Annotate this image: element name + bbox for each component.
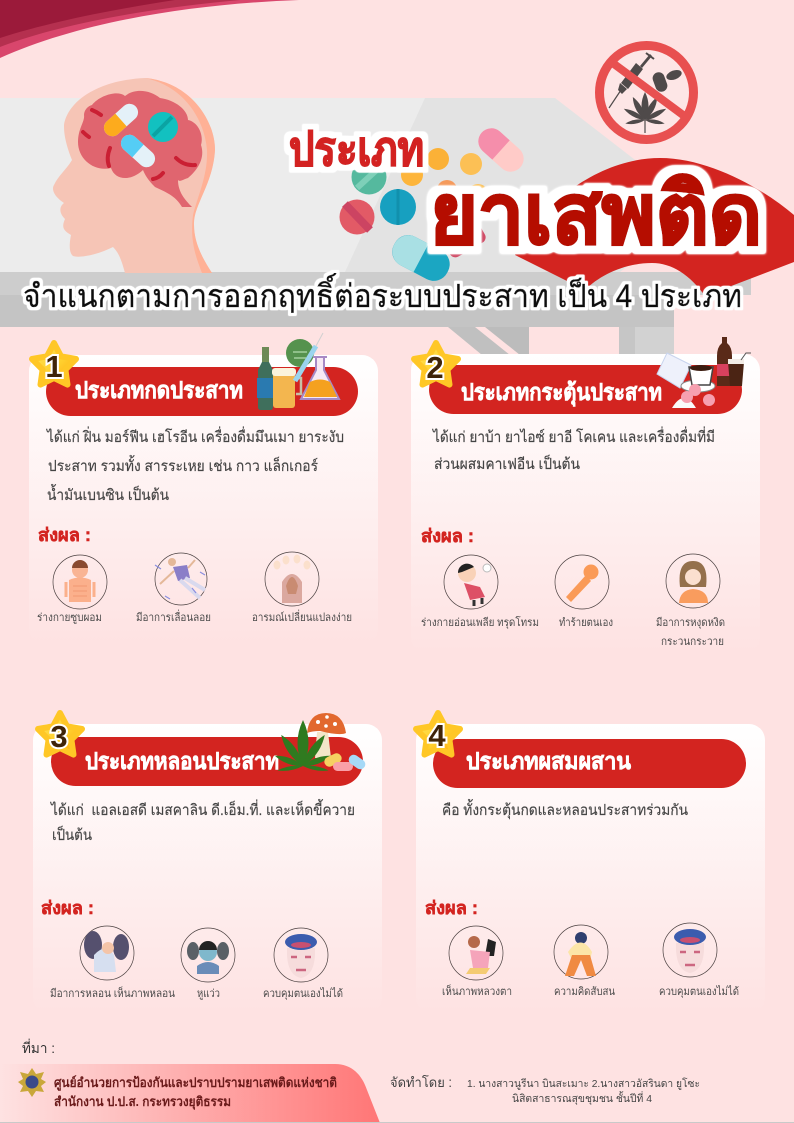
icon: head with brain and pills xyxy=(53,78,215,273)
effect: confused xyxy=(554,925,615,998)
effect: irritable xyxy=(656,554,725,648)
effect: floating xyxy=(136,553,211,624)
body text 1: ได้แก่ ฝิ่น มอร์ฟีน เฮโรอีน เครื่องดื่มมึนเมา ยาระงับ xyxy=(46,426,344,446)
subtitle: จำแนกตามการออกฤทธิ์ต่อระบบประสาท เป็น 4 ประเภท xyxy=(23,273,742,314)
icon: scattered pills xyxy=(340,123,529,286)
panel: type 2 stimulants xyxy=(411,337,760,654)
heading pill 1 xyxy=(46,367,358,416)
top-left swoosh xyxy=(0,0,299,58)
credits xyxy=(390,1074,700,1105)
icon: no drugs sign xyxy=(600,46,694,140)
panel: type 3 hallucinogens xyxy=(33,713,382,1014)
credits: 1. นางสาวนูรีนา บินสะเมาะ 2.นางสาวอัสรินดา ยูโซะ xyxy=(467,1077,700,1090)
agency name: สำนักงาน ป.ป.ส. กระทรวงยุติธรรม xyxy=(54,1094,231,1110)
red fan behind title xyxy=(515,158,794,296)
agency name: ศูนย์อำนวยการป้องกันและปราบปรามยาเสพติดแห่งชาติ xyxy=(54,1075,337,1091)
credits: นิสิตสาธารณสุขชุมชน ชั้นปีที่ 4 xyxy=(512,1091,652,1105)
effect: hallucination xyxy=(50,926,175,1000)
icon: powder, coffee, cola xyxy=(657,337,751,408)
title: ยาเสพติด: ยาเสพติด xyxy=(430,167,762,261)
effects heading 3: ส่งผล : xyxy=(41,898,94,918)
body text 3 xyxy=(50,799,355,844)
heading pill 3 xyxy=(51,737,363,786)
icon: alcohol and flask xyxy=(257,333,339,410)
effect: irritable: กระวนกระวาย xyxy=(661,636,724,648)
grey table backdrop xyxy=(0,98,751,355)
star number 1 xyxy=(32,343,76,385)
effect: fatigue: ร่างกายอ่อนเพลีย ทรุดโทรม xyxy=(421,615,539,629)
star number 3: 3 xyxy=(50,719,68,754)
star number 4 xyxy=(416,713,460,755)
icon: cannabis, mushroom, pills xyxy=(274,713,367,772)
heading pill 4 xyxy=(433,739,746,788)
effect: mood swings xyxy=(252,552,352,624)
effect: loss of control: ควบคุมตนเองไม่ได้ xyxy=(659,985,739,998)
footer banner xyxy=(0,1064,794,1123)
credits: จัดทำโดย : xyxy=(390,1074,452,1090)
icon: agency seal xyxy=(18,1068,46,1097)
heading pill 4: ประเภทผสมผสาน xyxy=(466,748,631,774)
body text 2 xyxy=(432,426,715,473)
star number 2: 2 xyxy=(426,350,444,385)
effects heading 4: ส่งผล : xyxy=(425,898,478,918)
star number 3 xyxy=(38,713,82,755)
effect: mood swings: อารมณ์เปลี่ยนแปลงง่าย xyxy=(252,609,352,624)
effect: thin body: ร่างกายซูบผอม xyxy=(37,612,102,624)
effect: loss of control xyxy=(263,928,343,1000)
effect: seeing things: เห็นภาพหลวงตา xyxy=(442,984,512,998)
effects heading 1: ส่งผล : xyxy=(38,525,91,545)
body text 1: น้ำมันเบนซิน เป็นต้น xyxy=(47,484,169,504)
heading pill 2 xyxy=(429,365,742,414)
star number 4: 4 xyxy=(428,718,446,753)
agency name xyxy=(54,1075,337,1110)
effect: confused: ความคิดสับสน xyxy=(554,986,615,998)
star number 1: 1 xyxy=(45,349,63,384)
heading pill 2: ประเภทกระตุ้นประสาท xyxy=(461,379,662,407)
effect: loss of control xyxy=(659,923,739,998)
effect: fatigue xyxy=(421,555,539,629)
star number 2 xyxy=(414,343,458,385)
body text 4: คือ ทั้งกระตุ้นกดและหลอนประสาทร่วมกัน xyxy=(442,799,688,820)
body text 2: ได้แก่ ยาบ้า ยาไอซ์ ยาอี โคเคน และเครื่องดื่มที่มี xyxy=(432,426,715,446)
effect: tinnitus xyxy=(181,928,235,1000)
panel: type 4 mixed xyxy=(416,713,765,1014)
panel: type 1 depressants xyxy=(29,333,378,645)
body text 2: ส่วนผสมคาเฟอีน เป็นต้น xyxy=(434,454,580,473)
heading pill 1: ประเภทกดประสาท xyxy=(75,377,243,403)
effect: floating: มีอาการเลื่อนลอย xyxy=(136,609,211,624)
effect: tinnitus: หูแว่ว xyxy=(197,988,220,1000)
source label: ที่มา : xyxy=(22,1039,55,1056)
effects heading 2: ส่งผล : xyxy=(421,526,474,546)
heading pill 3: ประเภทหลอนประสาท xyxy=(85,748,279,774)
effect: self harm xyxy=(555,555,613,629)
effect: hallucination: มีอาการหลอน เห็นภาพหลอน xyxy=(50,986,175,1000)
body text 3: เป็นต้น xyxy=(52,825,92,844)
effect: loss of control: ควบคุมตนเองไม่ได้ xyxy=(263,987,343,1000)
effect: irritable: มีอาการหงุดหงิด xyxy=(656,616,725,629)
body text 1: ประสาท รวมทั้ง สารระเหย เช่น กาว แล็กเกอร์ xyxy=(48,455,318,475)
body text 3: ได้แก่ แอลเอสดี เมสคาลิน ดี.เอ็ม.ที่. และเห็ดขี้ควาย xyxy=(50,799,355,819)
title: ประเภท: ประเภท xyxy=(289,122,424,175)
body text 1 xyxy=(46,426,344,504)
effect: seeing things xyxy=(442,926,512,998)
effect: self harm: ทำร้ายตนเอง xyxy=(559,617,613,629)
effect: thin body xyxy=(37,555,107,624)
